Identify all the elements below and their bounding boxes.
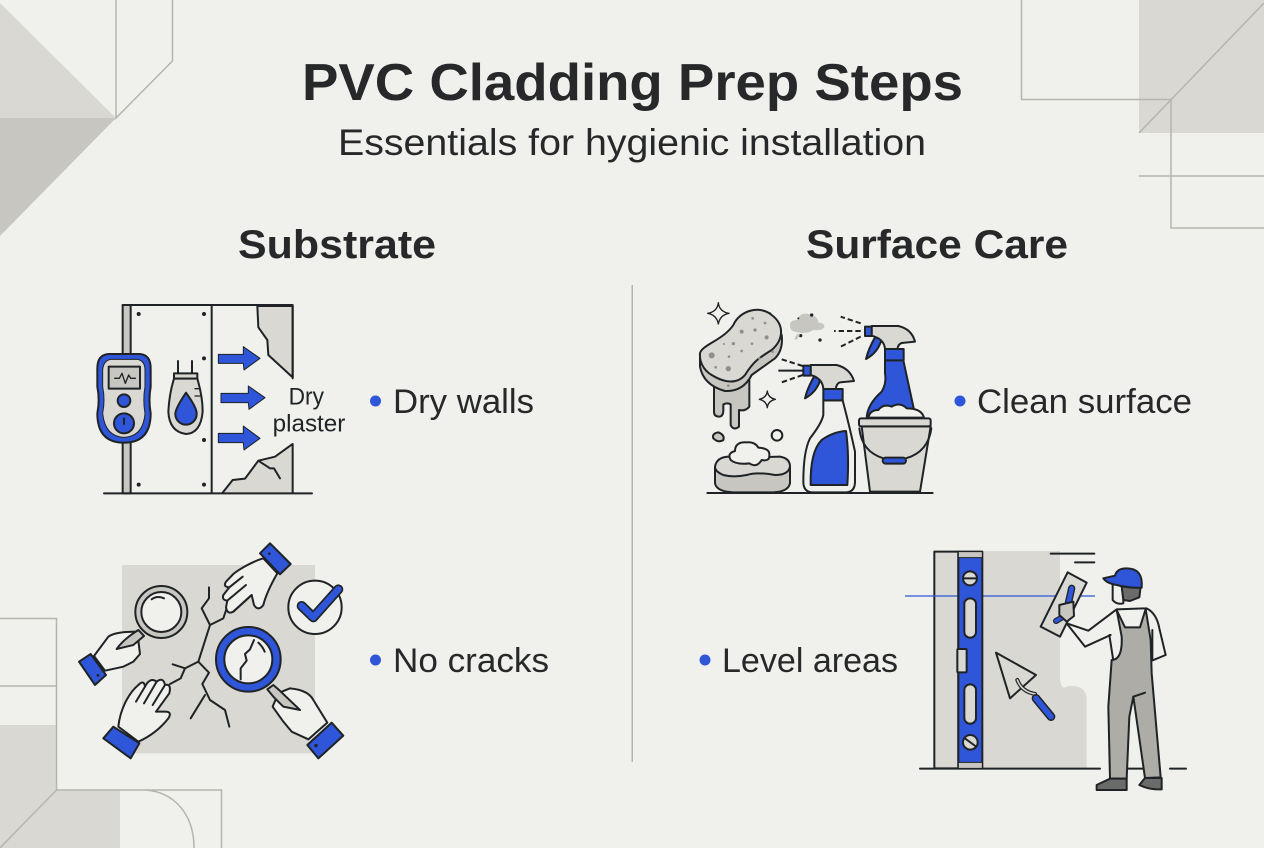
icon: dripping sponge: [700, 310, 782, 428]
heading: Substrate: Substrate: [238, 223, 436, 267]
icon: plastering float: [1041, 572, 1087, 637]
illustration: level areas: [905, 551, 1186, 790]
icon: spirit level: [957, 552, 982, 768]
icon: sparkles: [708, 303, 775, 408]
icon: hand bottom left: [103, 680, 170, 758]
title: PVC Cladding Prep Steps: [302, 54, 963, 112]
decoration: bottom-left corner shapes: [0, 618, 222, 848]
bullet: No cracks: No cracks: [393, 642, 549, 680]
icon: blue magnifier with hand: [216, 627, 343, 758]
bullet: Level areas: Level areas: [722, 642, 898, 680]
illustration: no cracks: [79, 543, 343, 758]
icon: bottom sponge: [713, 430, 790, 492]
icon: arrows: [218, 347, 265, 450]
icon: moisture probe: [168, 361, 203, 434]
subtitle: Essentials for hygienic installation: [338, 122, 926, 163]
label: Dry plaster: plaster: [273, 410, 345, 437]
icon: bucket: [859, 405, 931, 492]
bullet: Dry walls: Dry walls: [393, 383, 534, 421]
bullet: Clean surface: Clean surface: [977, 383, 1192, 421]
icon: moisture meter: [97, 354, 151, 443]
icon: hand top right: [223, 543, 291, 613]
illustration: dry walls: [97, 305, 345, 493]
heading: Surface Care: Surface Care: [806, 223, 1068, 267]
label: Dry plaster: [273, 383, 345, 437]
illustration: clean surface: [700, 303, 933, 493]
icon: magnifier left with hand: [79, 586, 187, 685]
column divider: [632, 285, 633, 762]
icon: spray lines: [778, 317, 861, 382]
decoration: top-left corner shapes: [0, 0, 172, 236]
icon: worker: [1067, 568, 1166, 790]
icon: dirt cloud: [790, 313, 824, 342]
label: Dry plaster: Dry: [289, 383, 324, 410]
icon: trowel: [996, 653, 1051, 717]
decoration: top-right corner shapes: [1022, 0, 1264, 228]
icon: large spray bottle: [865, 326, 916, 419]
icon: check mark: [288, 581, 342, 634]
icon: small spray bottle: [803, 365, 855, 492]
